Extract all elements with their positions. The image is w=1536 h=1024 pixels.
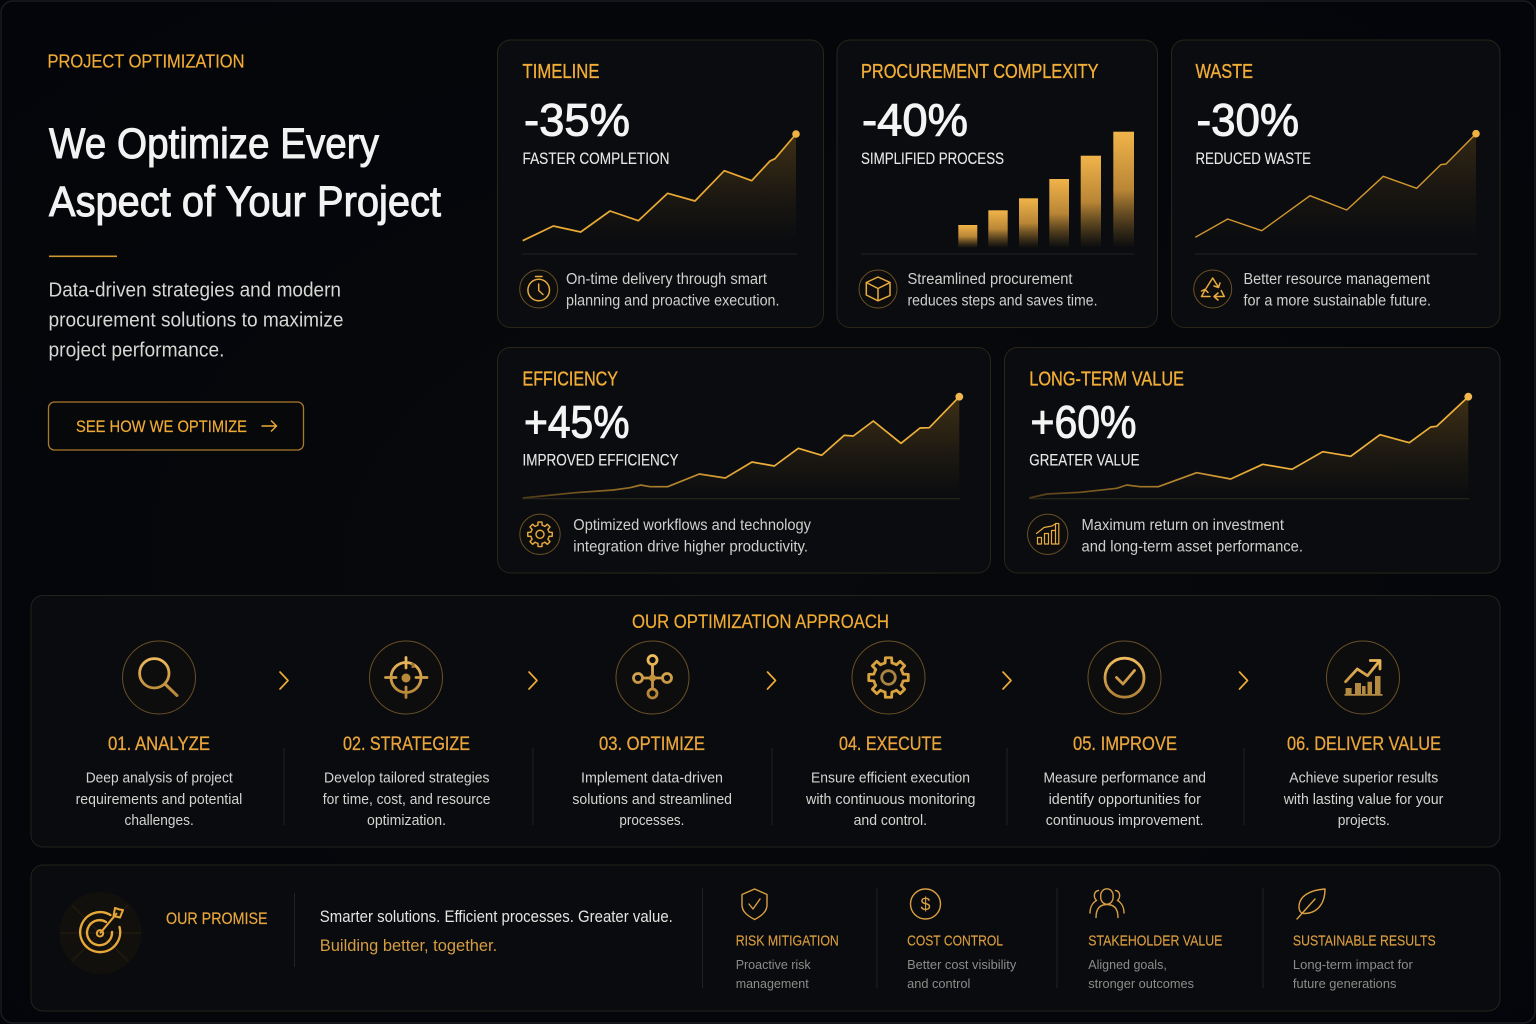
step description: Implement data-driven — [581, 770, 723, 787]
step description: optimization. — [367, 812, 446, 829]
step 03 optimize — [572, 641, 732, 829]
card description: Streamlined procurement — [908, 271, 1073, 288]
card description — [908, 271, 1098, 309]
panel: timeline — [498, 40, 824, 328]
benefit text — [1088, 957, 1194, 991]
step description: projects. — [1338, 812, 1390, 829]
card heading: TIMELINE — [522, 61, 600, 83]
step 03 optimize: 03. OPTIMIZE — [599, 734, 705, 755]
card heading: PROCUREMENT COMPLEXITY — [861, 61, 1098, 83]
intro paragraph: project performance. — [48, 340, 224, 362]
card description: planning and proactive execution. — [566, 292, 780, 309]
title: Aspect of Your Project — [49, 178, 441, 226]
title — [49, 120, 441, 226]
icon: connected nodes — [616, 641, 689, 714]
card description — [566, 271, 780, 309]
icon: people — [1090, 889, 1124, 918]
metric: -40%: -40% — [862, 94, 968, 146]
panel: waste — [1172, 40, 1500, 328]
benefit: risk mitigation — [736, 889, 839, 991]
icon: cog — [852, 641, 925, 714]
step description — [572, 770, 732, 829]
panel: procurement complexity — [837, 40, 1158, 328]
step description: continuous improvement. — [1046, 812, 1204, 829]
card description — [1244, 271, 1431, 309]
step description — [1044, 770, 1206, 829]
step description: challenges. — [124, 812, 194, 829]
intro paragraph: procurement solutions to maximize — [48, 310, 344, 332]
card description — [1082, 517, 1303, 556]
card description: Better resource management — [1244, 271, 1431, 288]
step description: for time, cost, and resource — [323, 791, 490, 808]
step description — [323, 770, 490, 829]
line chart: timeline — [523, 130, 800, 241]
step description: Measure performance and — [1044, 770, 1206, 787]
metric label: SIMPLIFIED PROCESS — [861, 150, 1004, 168]
card description: On-time delivery through smart — [566, 271, 768, 288]
step description: Deep analysis of project — [86, 770, 233, 787]
icon: recycle — [1194, 270, 1232, 308]
benefit text: management — [736, 976, 809, 991]
benefit: sustainable results: SUSTAINABLE RESULTS — [1293, 934, 1436, 950]
step description: solutions and streamlined — [572, 791, 732, 808]
step 02 strategize — [323, 641, 490, 829]
step description: identify opportunities for — [1049, 791, 1201, 808]
icon: box — [859, 270, 897, 308]
benefit text: Long-term impact for — [1293, 957, 1413, 972]
title: We Optimize Every — [49, 120, 379, 168]
arrow: step 5 to 6 — [1240, 672, 1248, 689]
icon: crosshair target — [370, 641, 442, 714]
benefit: cost control — [907, 889, 1017, 991]
benefit text: and control — [907, 976, 971, 991]
step description: and control. — [854, 812, 927, 829]
step 04 execute — [805, 641, 976, 829]
line chart: long-term value — [1029, 393, 1472, 498]
step 05 improve — [1044, 641, 1206, 829]
button: see how we optimize — [48, 402, 304, 450]
arrow: step 2 to 3 — [529, 672, 537, 689]
card heading: EFFICIENCY — [522, 369, 618, 391]
step 05 improve: 05. IMPROVE — [1073, 734, 1177, 755]
icon: growth chart — [1326, 641, 1400, 714]
card heading: LONG-TERM VALUE — [1029, 369, 1184, 391]
eyebrow label: PROJECT OPTIMIZATION — [48, 52, 244, 72]
panel: efficiency — [498, 348, 990, 573]
step 01 analyze: 01. ANALYZE — [108, 734, 210, 755]
metric label: IMPROVED EFFICIENCY — [522, 451, 678, 469]
step description: Develop tailored strategies — [324, 770, 490, 787]
benefit text — [1293, 957, 1413, 991]
card heading: WASTE — [1196, 61, 1253, 83]
step description: Achieve superior results — [1289, 770, 1438, 787]
benefit: cost control: COST CONTROL — [907, 934, 1003, 950]
arrow: step 3 to 4 — [768, 672, 776, 689]
promise statement — [320, 908, 673, 955]
card description: integration drive higher productivity. — [573, 539, 808, 556]
intro paragraph: Data-driven strategies and modern — [48, 280, 341, 302]
benefit text — [907, 957, 1017, 991]
promise statement: Smarter solutions. Efficient processes. Greater value. — [320, 908, 673, 926]
step 06 deliver value: 06. DELIVER VALUE — [1287, 734, 1441, 755]
benefit text: future generations — [1293, 976, 1397, 991]
arrow: step 1 to 2 — [280, 672, 288, 689]
step description: Ensure efficient execution — [811, 770, 970, 787]
metric: -35%: -35% — [524, 94, 630, 146]
benefit: sustainable results — [1293, 889, 1436, 991]
metric: +45%: +45% — [524, 397, 630, 448]
icon: rising bars — [1028, 514, 1068, 554]
benefit: stakeholder value: STAKEHOLDER VALUE — [1088, 934, 1223, 950]
step 06 deliver value — [1283, 641, 1443, 829]
step description — [1283, 770, 1443, 829]
benefit text: stronger outcomes — [1088, 976, 1194, 991]
metric label: GREATER VALUE — [1029, 451, 1140, 469]
promise statement: Building better, together. — [320, 936, 497, 955]
arrow: step 4 to 5 — [1003, 672, 1011, 689]
benefit text: Aligned goals, — [1088, 957, 1167, 972]
step 02 strategize: 02. STRATEGIZE — [343, 734, 470, 755]
benefit text — [736, 957, 811, 991]
icon: magnifier — [122, 641, 196, 714]
panel: optimization approach — [31, 596, 1500, 847]
icon: shield — [742, 889, 767, 920]
icon: target with arrow — [60, 892, 142, 974]
icon: clock — [520, 270, 558, 308]
benefit text: Better cost visibility — [907, 957, 1017, 972]
intro paragraph — [48, 280, 344, 362]
line chart: efficiency — [523, 393, 963, 498]
benefit: risk mitigation: RISK MITIGATION — [736, 934, 839, 950]
metric label: REDUCED WASTE — [1196, 150, 1311, 168]
step description: with lasting value for your — [1283, 791, 1443, 808]
step description — [805, 770, 976, 829]
button: see how we optimize: SEE HOW WE OPTIMIZE — [76, 418, 247, 436]
panel: long-term value — [1004, 348, 1500, 573]
card description: Maximum return on investment — [1082, 517, 1285, 534]
card description: Optimized workflows and technology — [573, 517, 811, 534]
step 04 execute: 04. EXECUTE — [839, 734, 942, 755]
benefit text: Proactive risk — [736, 957, 811, 972]
step description: with continuous monitoring — [805, 791, 976, 808]
card description: reduces steps and saves time. — [908, 292, 1098, 309]
step description: requirements and potential — [76, 791, 242, 808]
benefit: stakeholder value — [1088, 889, 1223, 991]
card description: for a more sustainable future. — [1244, 292, 1431, 309]
card description — [573, 517, 811, 556]
metric label: FASTER COMPLETION — [522, 150, 670, 168]
icon: check circle — [1088, 641, 1161, 714]
promise label: OUR PROMISE — [166, 909, 268, 928]
icon: leaf — [1297, 889, 1325, 919]
icon: dollar coin: $ — [920, 894, 931, 914]
metric: -30%: -30% — [1196, 94, 1299, 146]
step description — [76, 770, 242, 829]
section heading: OUR OPTIMIZATION APPROACH — [632, 612, 889, 633]
step description: processes. — [619, 812, 684, 829]
icon: gear — [520, 514, 560, 554]
bar chart: procurement steps — [958, 132, 1134, 248]
line chart: waste — [1195, 130, 1480, 240]
header block — [48, 52, 441, 450]
panel: our promise — [31, 865, 1500, 1011]
metric: +60%: +60% — [1030, 397, 1136, 448]
step 01 analyze — [76, 641, 242, 829]
card description: and long-term asset performance. — [1082, 539, 1303, 556]
